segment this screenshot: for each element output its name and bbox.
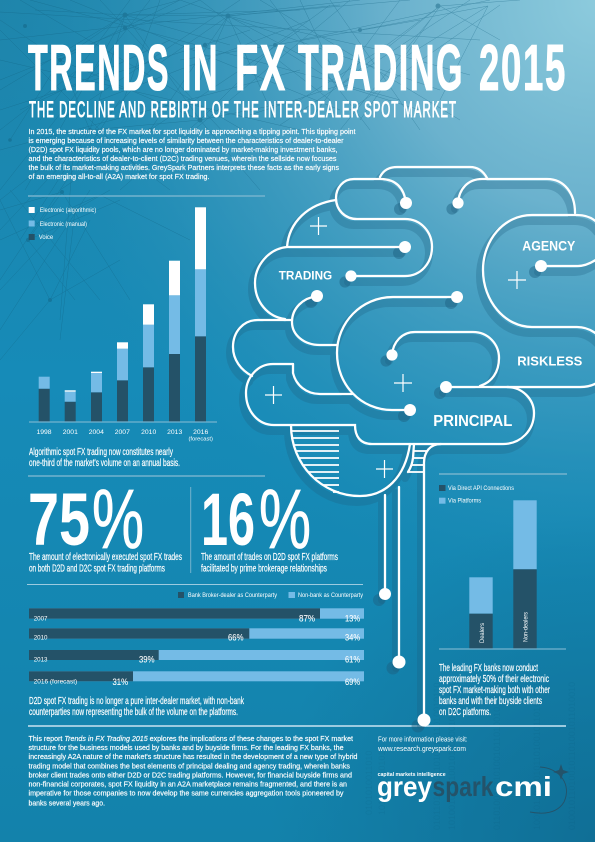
- stat: 16%: [201, 472, 338, 574]
- title: FX: [235, 31, 287, 104]
- counterparty bar chart: [29, 592, 364, 688]
- plus icons: [265, 217, 526, 478]
- row: 2013: 2013: [34, 656, 48, 664]
- bars: [39, 207, 206, 422]
- counterparty caption: counterparties now representing the bulk of the volume on the platforms.: [29, 706, 238, 718]
- row: 2016 forecast: [29, 671, 364, 688]
- logo: greyspark cmi: spark: [432, 771, 494, 802]
- chart legend: [29, 207, 96, 241]
- binary pattern: 101001011010010110100101101001: [447, 682, 457, 830]
- intro paragraph: In 2015, the structure of the FX market for spot liquidity is approaching a tipping point. This tipping point: [28, 127, 356, 136]
- connector dots: [311, 197, 547, 726]
- axis labels: 1998: [36, 429, 52, 436]
- axis labels: (forecast): [188, 436, 213, 442]
- intro paragraph: of an emerging all-to-all (A2A) market for spot FX trading.: [28, 172, 210, 181]
- binary pattern: 0101010011010: [364, 751, 374, 815]
- brain outlines: [233, 167, 595, 720]
- report summary: broker client trades onto either D2D or D2C trading platforms. However, for financial buyside firms and: [28, 770, 352, 779]
- hatching: [291, 431, 427, 492]
- logo: greyspark cmi: cmi: [495, 771, 552, 802]
- report summary: trading model that combines the best elements of principal dealing and agency trading, wherein banks: [28, 762, 350, 770]
- stat: 16%: %: [259, 472, 311, 566]
- row: 2007: [29, 608, 364, 624]
- stat: 75%: [28, 472, 182, 574]
- contact info: For more information please visit:: [378, 736, 468, 744]
- chart legend: Electronic (algorithmic): [40, 207, 96, 214]
- report summary: imperative for those companies to now develop the same currencies aggregation tools pioneered by: [28, 789, 344, 798]
- intro paragraph: the bulk of its market-making activities. GreySpark Partners interprets these facts as the early signs: [28, 163, 339, 172]
- chart legend: Electronic (manual): [40, 221, 87, 228]
- API chart caption: [439, 662, 550, 718]
- logo: greyspark cmi: grey: [377, 771, 432, 802]
- API legend: Via Direct API Connections: [448, 485, 514, 492]
- counterparty caption: [29, 695, 244, 718]
- binary pattern: 100101101001011010010110100101: [532, 682, 542, 830]
- counterparty legend: [178, 592, 364, 599]
- row: 2010: 34%: [345, 632, 360, 644]
- report summary: structure for the business models used by banks and by buyside firms. For the leading FX banks, the: [28, 743, 344, 752]
- stat: 75%: 75: [28, 478, 90, 561]
- axis labels: 2001: [63, 429, 78, 436]
- chart caption: one-third of the market's volume on an annual basis.: [29, 457, 180, 469]
- axis labels: 2004: [89, 429, 104, 436]
- divider lines: [28, 196, 567, 726]
- counterparty caption: D2D spot FX trading is no longer a pure inter-dealer market, with non-bank: [29, 695, 244, 707]
- title: TRENDS: [28, 31, 170, 104]
- row: 2016 forecast: 2016 (forecast): [34, 679, 77, 686]
- chart legend: Voice: [39, 234, 54, 241]
- row: 2016 forecast: 69%: [345, 677, 360, 688]
- row: 2013: [29, 650, 364, 666]
- label: principal: PRINCIPAL: [433, 413, 512, 430]
- title: IN: [182, 31, 219, 104]
- axis labels: 2013: [167, 429, 182, 436]
- chart caption: Algorithmic spot FX trading now constitutes nearly: [29, 446, 173, 458]
- row: 2007: 13%: [345, 614, 360, 624]
- stacked bar chart: market volume: [29, 207, 217, 442]
- stat: 75%: %: [92, 472, 144, 566]
- bar: non-dealers: Non-dealers: [522, 612, 530, 642]
- intro paragraph: and the characteristics of dealer-to-client (D2C) trading venues, wherein the sellside now focuses: [28, 154, 337, 163]
- report summary: This report Trends in FX Trading 2015 explores the implications of these changes to the spot FX market: [28, 734, 353, 743]
- report summary: banks several years ago.: [28, 798, 105, 807]
- binary pattern: 010110100101101001011010010110: [432, 682, 442, 830]
- counterparty legend: Bank Broker-dealer as Counterparty: [188, 592, 278, 599]
- stat: 75%: The amount of electronically executed spot FX trades: [29, 551, 182, 563]
- logo: greyspark cmi: [377, 764, 569, 813]
- row: 2010: 2010: [34, 634, 48, 642]
- API vs platform bar chart: [439, 485, 566, 649]
- brain diagram: [230, 167, 595, 732]
- report summary: non-financial corporates, spot FX liquidity in an A2A marketplace remains fragmented, and there is an: [28, 779, 347, 788]
- bar: dealers: Dealers: [479, 623, 486, 643]
- binary pattern: 1010110010101: [377, 751, 387, 815]
- intro paragraph: (D2D) spot FX liquidity pools, which are no longer dominated by market-making investment banks,: [28, 145, 338, 154]
- chart caption: [29, 446, 180, 469]
- axis labels: 2007: [115, 429, 130, 436]
- axis labels: [36, 429, 213, 442]
- title: [28, 31, 567, 104]
- stat: 16%: 16: [201, 478, 255, 561]
- intro paragraph: is emerging because of increasing levels of similarity between the characteristics of dealer-to-dealer: [28, 136, 344, 145]
- logo: greyspark cmi: capital markets intelligence: [378, 772, 446, 778]
- brain shadow: [230, 173, 595, 732]
- API legend: Via Platforms: [448, 498, 481, 504]
- network pattern: [0, 0, 520, 360]
- binary pattern: 011010010110100101101001011010: [492, 682, 502, 830]
- row: 2007: 87%: [299, 614, 315, 624]
- binary pattern: [364, 682, 577, 830]
- stat: 16%: facilitated by prime brokerage relationships: [201, 562, 327, 574]
- API legend: [439, 485, 514, 504]
- row: 2016 forecast: 31%: [112, 677, 128, 688]
- row: 2013: 61%: [345, 654, 360, 666]
- label: riskless: RISKLESS: [517, 354, 582, 368]
- row: 2007: 2007: [34, 616, 48, 622]
- bar: dealers: [469, 577, 493, 649]
- label: trading: TRADING: [279, 269, 332, 283]
- row: 2010: 66%: [228, 632, 244, 644]
- counterparty legend: Non-bank as Counterparty: [298, 592, 364, 599]
- intro paragraph: [28, 127, 356, 181]
- report summary: increasingly A2A nature of the market's structure has resulted in the development of a new type of hybrid: [28, 752, 358, 761]
- contact info: [377, 736, 468, 753]
- report summary: [28, 734, 358, 807]
- label: agency: AGENCY: [522, 239, 575, 254]
- row: 2010: [29, 628, 364, 644]
- bar: non-dealers: [513, 500, 537, 649]
- binary pattern: 010010110100101101001011010010: [567, 682, 577, 830]
- axis labels: 2016: [193, 429, 208, 436]
- row: 2013: 39%: [139, 654, 155, 666]
- API chart caption: on D2C platforms.: [439, 706, 491, 718]
- axis labels: 2010: [141, 429, 156, 436]
- stat: 75%: on both D2D and D2C spot FX trading platforms: [29, 562, 165, 574]
- stat: 16%: The amount of trades on D2D spot FX platforms: [201, 551, 338, 563]
- axis: [29, 421, 217, 423]
- contact info: www.research.greyspark.com: [377, 746, 466, 753]
